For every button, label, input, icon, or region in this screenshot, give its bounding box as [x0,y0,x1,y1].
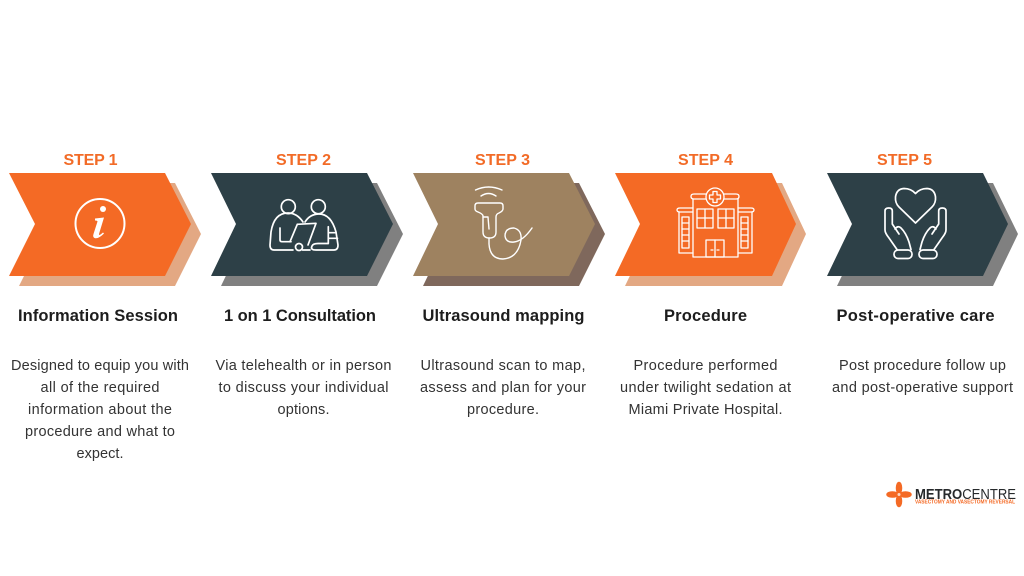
icon: information [76,199,124,248]
icon: two people consulting [270,200,338,250]
step 4 label: STEP 4 [678,152,733,169]
step 2 chevron shadow [221,183,403,286]
step 5 heading: Post-operative care [836,307,994,325]
step 1 description: all of the required [40,380,160,396]
panel: step 1 [9,152,201,462]
step 3 description [420,358,586,418]
step 3 heading: Ultrasound mapping [422,307,584,325]
icon: ultrasound probe [475,187,532,259]
step 1 chevron shadow [19,183,201,286]
step 1 label: STEP 1 [64,152,118,169]
logo: Metro Centre [887,482,1016,506]
step 5 description [832,358,1013,396]
step 3 description: Ultrasound scan to map, [420,358,586,374]
step 1 description [11,358,189,462]
step 1 description: procedure and what to [25,424,175,440]
step 4 description [620,358,791,418]
step 5 chevron [827,173,1008,276]
step 2 description: to discuss your individual [218,380,388,396]
step 1 description: information about the [28,402,172,418]
icon: logo mark [887,482,911,506]
step 2 description [216,358,392,418]
step 3 description: assess and plan for your [420,380,586,396]
step 5 chevron shadow [837,183,1018,286]
step 4 description: Miami Private Hospital. [628,402,782,418]
panel: step 5 [827,152,1018,396]
step 5 label: STEP 5 [877,152,932,169]
logo wordmark: METROCENTRE [915,487,1016,503]
step 1 chevron [9,173,191,276]
step 1 description: Designed to equip you with [11,358,189,374]
step 1 description: expect. [76,446,124,462]
panel: step 4 [615,152,806,418]
panel: step 2 [211,152,403,418]
icon: hands holding heart [885,188,946,258]
step 2 description: options. [278,402,330,418]
step 5 description: Post procedure follow up [839,358,1006,374]
step 3 chevron [413,173,595,276]
step 1 heading: Information Session [18,307,178,325]
step 3 label: STEP 3 [475,152,530,169]
step 3 chevron shadow [423,183,605,286]
step 3 description: procedure. [467,402,539,418]
step 4 chevron shadow [625,183,806,286]
step 2 heading: 1 on 1 Consultation [224,307,376,325]
step 4 heading: Procedure [664,307,747,325]
icon: hospital [677,188,754,257]
step 4 description: Procedure performed [634,358,778,374]
logo tagline: VASECTOMY AND VASECTOMY REVERSAL [915,500,1015,506]
step 5 description: and post-operative support [832,380,1013,396]
step 2 chevron [211,173,393,276]
step 2 description: Via telehealth or in person [216,358,392,374]
step 4 chevron [615,173,796,276]
step 2 label: STEP 2 [276,152,331,169]
panel: step 3 [413,152,605,418]
step 4 description: under twilight sedation at [620,380,791,396]
